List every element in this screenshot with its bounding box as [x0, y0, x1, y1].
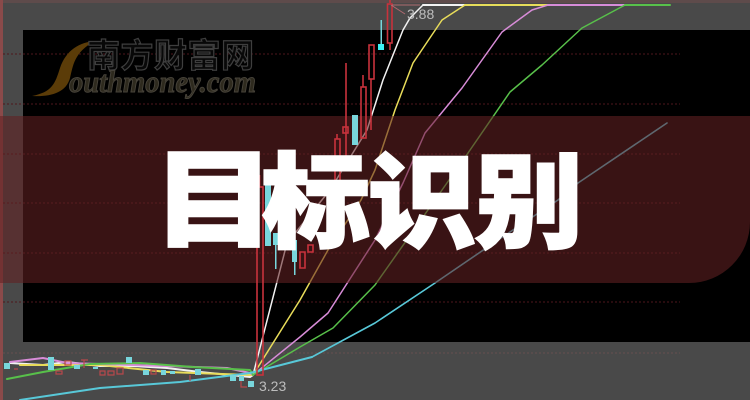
top marker: peak dashes and leader [391, 5, 420, 14]
rally candles [257, 0, 392, 375]
black chart panel [23, 30, 750, 342]
line: cyan MA [20, 123, 667, 400]
line: yellow MA [20, 5, 550, 375]
line: pink MA [10, 5, 628, 375]
watermark Chinese name: 南方财富网 [87, 37, 254, 74]
title: 识 [368, 147, 476, 261]
title [153, 143, 583, 261]
title: 目 [153, 143, 275, 261]
title: 标 [262, 147, 370, 261]
high price label: 3.88 [407, 6, 434, 22]
watermark: southmoney logo [32, 37, 256, 99]
icon: brown S swoosh [32, 41, 95, 96]
candlestick chart [4, 0, 392, 387]
maroon title band [0, 116, 750, 283]
low-range candles [4, 357, 254, 387]
line: white MA [10, 5, 465, 377]
title: 别 [475, 147, 583, 261]
low price label: 3.23 [259, 378, 286, 394]
watermark URL: outhmoney.com [69, 64, 256, 99]
